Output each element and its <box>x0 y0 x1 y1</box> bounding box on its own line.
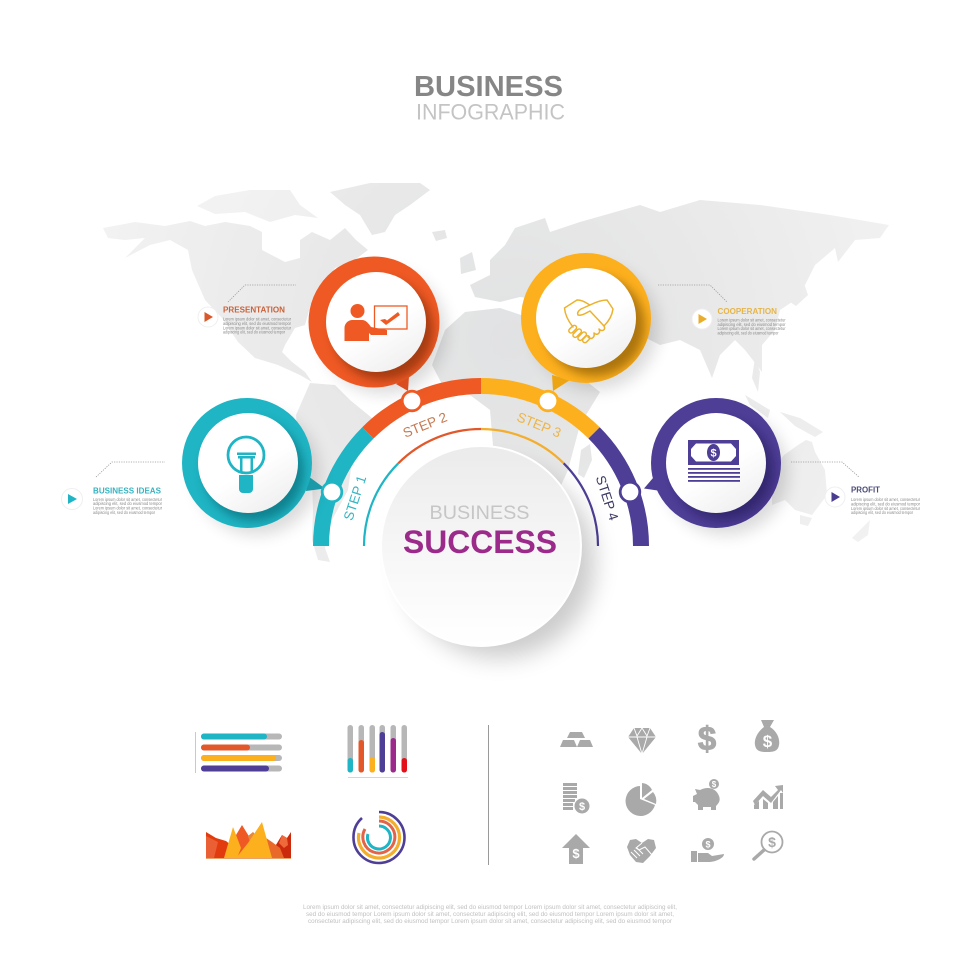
divider <box>488 725 489 865</box>
step 4 circle: profit <box>644 398 788 535</box>
callout: presentation: Lorem ipsum dolor sit amet, consectetur <box>223 316 292 322</box>
callout: business ideas: adipiscing elit, sed do eiusmod tempor <box>93 501 163 506</box>
step nodes <box>322 391 640 502</box>
chart: radial rings <box>353 812 404 863</box>
footer text: consectetur adipiscing elit, sed do eiusmod tempor Lorem ipsum dolor sit amet, consectetur adipiscing elit, sed do eiusmod tempor <box>308 919 672 925</box>
step labels: STEP 2 <box>401 409 449 441</box>
chart: area chart <box>206 822 291 859</box>
title: INFOGRAPHIC <box>416 100 565 124</box>
icon: pie chart <box>626 783 656 816</box>
callout: business ideas: adipiscing elit, sed do eiusmod tempor <box>93 510 156 515</box>
icon: banknote stack <box>688 440 740 482</box>
step labels <box>341 409 621 523</box>
icon: up arrow dollar <box>562 834 590 864</box>
center circle <box>381 446 595 658</box>
inner thin arc <box>364 429 598 546</box>
icon grid <box>560 720 783 864</box>
callout: profit: PROFIT <box>851 486 880 494</box>
callout: profit: adipiscing elit, sed do eiusmod tempor <box>851 510 914 515</box>
callout: profit: Lorem ipsum dolor sit amet, consectetur <box>851 497 921 502</box>
callout: cooperation: Lorem ipsum dolor sit amet, consectetur <box>718 318 786 322</box>
title <box>414 71 565 124</box>
icon: banknote stack: $ <box>710 448 717 460</box>
icon: handshake gray <box>627 839 656 863</box>
callout: presentation <box>198 285 296 334</box>
callout: cooperation: COOPERATION <box>718 307 777 316</box>
callout: presentation: adipiscing elit, sed do eiusmod tempor <box>223 330 286 334</box>
step 2 circle: presentation <box>308 256 446 394</box>
icon: presenter at board <box>344 304 407 341</box>
callout: presentation: PRESENTATION <box>223 306 285 314</box>
icon: money bag: $ <box>763 732 773 751</box>
icon: magnifier dollar: $ <box>768 834 776 850</box>
callout: profit: Lorem ipsum dolor sit amet, consectetur <box>851 506 921 511</box>
footer text: sed do eiusmod tempor Lorem ipsum dolor sit amet, consectetur adipiscing elit, sed do eiusmod tempor Lorem ipsum dolor sit amet, <box>306 912 674 918</box>
step 1 circle: business ideas <box>182 398 325 535</box>
step labels: STEP 3 <box>515 409 563 441</box>
callout: cooperation: adipiscing elit, sed do eiusmod tempor <box>718 322 786 327</box>
callout: profit <box>791 462 921 515</box>
icon: hand holding coin <box>691 838 724 862</box>
callout: profit: adipiscing elit, sed do eiusmod tempor <box>851 502 921 506</box>
center circle: BUSINESS <box>430 502 530 524</box>
callout: presentation: adipiscing elit, sed do eiusmod tempor <box>223 321 292 326</box>
center circle: SUCCESS <box>403 524 557 560</box>
callout: presentation: Lorem ipsum dolor sit amet, consectetur <box>223 326 292 330</box>
icon: hand holding coin: $ <box>705 840 711 850</box>
step 3 circle: cooperation <box>521 253 658 391</box>
icon: growth chart <box>753 785 783 809</box>
title: BUSINESS <box>414 71 563 103</box>
icon: light bulb <box>228 437 264 493</box>
callout: business ideas: BUSINESS IDEAS <box>93 486 162 496</box>
callout: cooperation <box>658 285 786 336</box>
icon: gold bars <box>560 732 593 747</box>
icon: handshake <box>564 300 613 344</box>
icon: coins <box>563 783 590 814</box>
chart: vertical progress bars <box>348 725 408 778</box>
callout: business ideas: Lorem ipsum dolor sit amet, consectetur <box>93 497 163 502</box>
callout: cooperation: adipiscing elit, sed do eiusmod tempor <box>718 330 779 336</box>
icon: coins: $ <box>579 801 585 813</box>
icon: diamond <box>628 728 656 754</box>
footer text: Lorem ipsum dolor sit amet, consectetur adipiscing elit, sed do eiusmod tempor Lorem ipsum dolor sit amet, consectetur adipiscing elit, <box>303 905 677 911</box>
callout: cooperation: Lorem ipsum dolor sit amet, consectetur <box>718 326 786 331</box>
chart: horizontal progress bars <box>195 732 282 773</box>
step labels: STEP 4 <box>593 474 621 523</box>
icon: piggy bank <box>693 779 720 810</box>
step labels: STEP 1 <box>341 474 369 522</box>
semicircle step arc <box>321 386 641 546</box>
footer text <box>303 905 677 925</box>
callout: business ideas <box>62 462 165 515</box>
callout: business ideas: Lorem ipsum dolor sit amet, consectetur <box>93 506 163 510</box>
icon: piggy bank: $ <box>712 780 717 789</box>
icon: up arrow dollar: $ <box>572 846 580 861</box>
icon: money bag <box>755 720 779 752</box>
icon: magnifier dollar <box>754 832 782 859</box>
world map <box>103 183 889 562</box>
icon: dollar sign: $ <box>698 720 716 757</box>
